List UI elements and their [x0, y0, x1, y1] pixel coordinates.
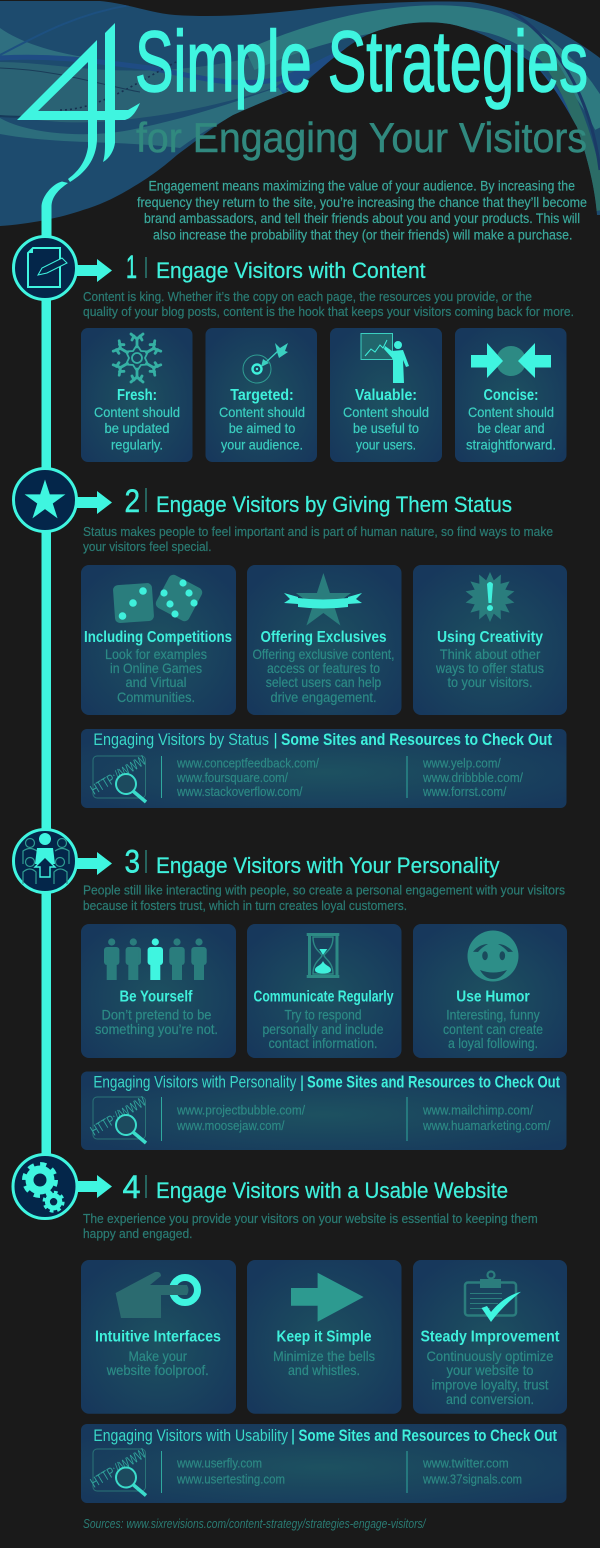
description	[83, 289, 574, 319]
icon: presenter with chart	[361, 334, 409, 383]
intro text	[137, 178, 587, 242]
links: www.37signals.com	[422, 1472, 522, 1486]
resources panel: status: |	[273, 731, 278, 749]
card: intuitive interfaces	[81, 1260, 236, 1414]
links: www.forrst.com/	[422, 785, 507, 799]
section 3	[14, 830, 567, 1150]
card: offering exclusives: Offering exclusive content,	[252, 646, 394, 662]
card: targeted: Targeted:	[230, 387, 294, 404]
icon: converging arrows	[471, 343, 551, 378]
card: valuable: your users.	[356, 436, 416, 452]
resources panel: status	[81, 729, 566, 808]
card: steady improvement: your website to	[446, 1362, 534, 1378]
icon: url magnifier	[87, 1093, 149, 1143]
icon: target and arrow	[243, 343, 288, 383]
number: 1	[126, 249, 137, 285]
icon: url magnifier: HTTP://WWW	[87, 1093, 149, 1139]
card: use humor: content can create	[443, 1021, 543, 1037]
card: fresh: Fresh:	[117, 387, 157, 404]
card: keep it simple: and whistles.	[288, 1362, 360, 1378]
resources panel: usability	[81, 1424, 566, 1503]
description	[83, 1211, 538, 1241]
number: 2	[124, 483, 140, 519]
numeral 4	[17, 23, 140, 182]
description: The experience you provide your visitors on your website is essential to keeping them	[83, 1211, 538, 1226]
resources panel: status: Some Sites and Resources to Check Out	[281, 731, 552, 749]
card: using creativity: to your visitors.	[448, 674, 532, 690]
resources panel: usability: Engaging Visitors with Usability	[93, 1427, 289, 1445]
links: www.conceptfeedback.com/	[176, 757, 319, 771]
card: including competitions: Including Competitions	[84, 629, 232, 646]
resources panel: personality	[81, 1072, 566, 1150]
heading: Engage Visitors with Your Personality	[156, 853, 500, 878]
card: including competitions	[81, 565, 236, 715]
card: communicate regularly: contact information.	[268, 1035, 378, 1051]
description	[83, 882, 565, 913]
card: using creativity: Using Creativity	[437, 629, 543, 646]
card: be yourself: Don’t pretend to be	[102, 1007, 212, 1023]
icon: star	[14, 468, 76, 532]
card: concise: straightforward.	[466, 436, 556, 452]
icon: row of people	[104, 938, 207, 980]
icon: dice	[113, 573, 204, 623]
card: targeted: Content should	[219, 404, 305, 420]
card: using creativity	[413, 565, 567, 715]
card: offering exclusives	[247, 565, 402, 715]
card: use humor: Interesting, funny	[446, 1007, 540, 1023]
card: steady improvement	[413, 1260, 567, 1414]
card: valuable: be useful to	[353, 420, 419, 436]
card: communicate regularly	[247, 924, 402, 1058]
icon: url magnifier	[87, 1445, 149, 1496]
heading: Engage Visitors with a Usable Website	[156, 1178, 508, 1203]
card: including competitions: in Online Games	[110, 660, 202, 676]
links: www.usertesting.com	[176, 1472, 285, 1486]
card: concise: Content should	[468, 404, 554, 420]
card: fresh	[81, 328, 192, 462]
icon: url magnifier	[87, 752, 149, 802]
card: use humor: a loyal following.	[448, 1035, 538, 1051]
card: steady improvement: and conversion.	[446, 1391, 534, 1407]
number: 3	[124, 844, 140, 880]
links: www.huamarketing.com/	[422, 1119, 551, 1133]
description: because it fosters trust, which in turn creates loyal customers.	[83, 898, 407, 913]
arrow	[78, 1175, 112, 1198]
arrow	[77, 259, 112, 282]
card: offering exclusives: select users can help	[266, 674, 381, 690]
links: www.twitter.com	[422, 1457, 509, 1471]
icon: exclamation burst	[466, 572, 514, 622]
card: targeted	[206, 328, 317, 462]
card: use humor	[413, 924, 567, 1058]
card: intuitive interfaces: website foolproof.	[106, 1362, 209, 1378]
card: concise: be clear and	[478, 420, 544, 436]
background wave	[0, 1, 600, 226]
icon: document and pencil	[14, 236, 76, 300]
icon: snowflake	[113, 334, 161, 382]
resources panel: usability: |	[291, 1427, 295, 1445]
card: including competitions: Communities.	[117, 689, 195, 705]
card: concise	[455, 328, 566, 462]
card: including competitions: and Virtual	[126, 674, 186, 690]
icon: crowd with person	[14, 830, 76, 892]
links	[176, 1103, 551, 1133]
card: be yourself	[81, 924, 236, 1058]
arrow	[77, 852, 112, 875]
section 2	[14, 468, 567, 808]
description: happy and engaged.	[83, 1226, 192, 1241]
card: steady improvement: Steady Improvement	[420, 1329, 560, 1346]
card: targeted: be aimed to	[229, 420, 295, 436]
card: valuable: Valuable:	[355, 387, 417, 404]
links: www.moosejaw.com/	[176, 1119, 285, 1133]
card: communicate regularly: Communicate Regularly	[254, 989, 394, 1006]
sources: Sources: www.sixrevisions.com/content-strategy/strategies-engage-visitors/	[83, 1517, 427, 1531]
card: be yourself: something you’re not.	[95, 1021, 218, 1037]
links: www.foursquare.com/	[176, 771, 288, 785]
resources panel: personality: Engaging Visitors with Personality	[93, 1074, 297, 1092]
icon: arrow	[291, 1273, 364, 1322]
links: www.mailchimp.com/	[422, 1103, 533, 1117]
card: fresh: Content should	[94, 404, 180, 420]
card: offering exclusives: drive engagement.	[270, 689, 376, 705]
description: People still like interacting with people, so create a personal engagement with your visitors	[83, 882, 565, 898]
card: communicate regularly: personally and include	[262, 1021, 384, 1037]
heading: Engage Visitors with Content	[156, 258, 426, 283]
icon: clipboard and check	[465, 1272, 521, 1322]
icon: hourglass	[307, 933, 339, 978]
card: communicate regularly: Try to respond	[284, 1007, 362, 1023]
card: valuable	[330, 328, 442, 462]
card: fresh: regularly.	[111, 436, 163, 452]
timeline line	[42, 182, 68, 1158]
section 1	[14, 236, 574, 462]
card: steady improvement: improve loyalty, trust	[432, 1376, 549, 1392]
links: www.stackoverflow.com/	[176, 785, 303, 799]
card: be yourself: Be Yourself	[120, 989, 193, 1006]
card: offering exclusives: Offering Exclusives	[260, 629, 386, 646]
card: keep it simple: Minimize the bells	[273, 1348, 375, 1364]
icon: gears	[13, 1154, 77, 1218]
description	[83, 524, 553, 554]
resources panel: personality: |	[300, 1074, 304, 1092]
number: 4	[122, 1169, 140, 1205]
description: your visitors feel special.	[83, 539, 212, 554]
card: steady improvement: Continuously optimize	[426, 1348, 554, 1364]
links	[176, 757, 523, 799]
resources panel: status: Engaging Visitors by Status	[93, 731, 269, 749]
card: keep it simple	[247, 1260, 402, 1414]
links: www.dribbble.com/	[422, 771, 523, 785]
links: www.yelp.com/	[422, 757, 501, 771]
card: targeted: your audience.	[221, 436, 303, 452]
description: quality of your blog posts, content is the hook that keeps your visitors coming back for more.	[83, 304, 574, 319]
card: valuable: Content should	[343, 404, 429, 420]
card: keep it simple: Keep it Simple	[276, 1329, 372, 1346]
card: use humor: Use Humor	[456, 989, 530, 1006]
links: www.userfly.com	[176, 1457, 262, 1471]
icon: url magnifier: HTTP://WWW	[87, 752, 149, 798]
heading: Engage Visitors by Giving Them Status	[156, 492, 512, 517]
card: offering exclusives: access or features to	[267, 660, 380, 676]
links: www.projectbubble.com/	[176, 1103, 305, 1117]
icon: star and ribbon	[284, 573, 362, 626]
icon: smiling face	[468, 930, 518, 982]
card: using creativity: Think about other	[440, 646, 541, 662]
card: fresh: be updated	[104, 420, 170, 436]
description: Content is king. Whether it’s the copy on each page, the resources you provide, or the	[83, 289, 532, 304]
card: intuitive interfaces: Intuitive Interfaces	[95, 1329, 221, 1346]
section 4	[13, 1154, 567, 1503]
arrow	[77, 491, 112, 514]
icon: finger pressing button	[116, 1272, 198, 1318]
icon: url magnifier: HTTP://WWW	[87, 1445, 149, 1491]
card: concise: Concise:	[484, 387, 538, 404]
links	[176, 1457, 522, 1486]
description: Status makes people to feel important and is part of human nature, so find ways to make	[83, 524, 553, 539]
card: including competitions: Look for examples	[105, 646, 207, 662]
card: intuitive interfaces: Make your	[128, 1348, 187, 1364]
card: using creativity: ways to offer status	[435, 660, 544, 676]
